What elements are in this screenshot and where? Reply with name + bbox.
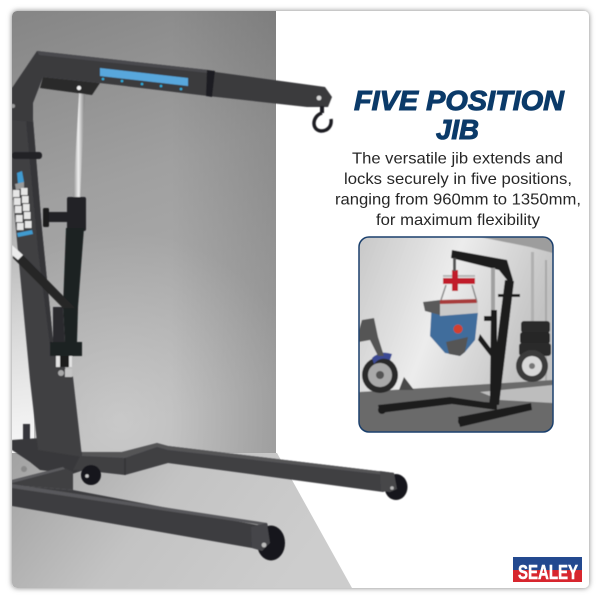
SEALEY logo: SEALEY	[518, 562, 578, 584]
lifting chains	[441, 285, 477, 302]
small caster wheel	[81, 465, 101, 485]
lower cylinder block	[50, 342, 82, 377]
mini crane	[378, 250, 532, 427]
jib inner extension	[208, 71, 332, 107]
hydraulic ram rod	[73, 93, 85, 200]
pivot pins	[77, 86, 81, 90]
jib arm	[11, 51, 332, 122]
lifting hook	[314, 106, 331, 131]
front wheel	[251, 523, 285, 560]
base rear frame	[12, 424, 84, 474]
garage floor	[359, 380, 553, 432]
heading	[354, 85, 565, 145]
heading: JIB	[436, 114, 479, 145]
capacity sticker	[13, 171, 33, 237]
body text	[335, 150, 581, 229]
stacked tyres	[516, 321, 551, 382]
body text: The versatile jib extends and	[352, 150, 563, 168]
grey studio backdrop	[12, 11, 352, 588]
base front leg	[12, 467, 270, 548]
base back wheel	[384, 474, 408, 500]
body text: locks securely in five positions,	[344, 171, 572, 188]
inset photo border	[359, 237, 553, 432]
engine block	[423, 299, 478, 356]
base back leg	[73, 443, 397, 492]
diagonal support brace	[12, 256, 74, 308]
spreader bar	[443, 258, 475, 291]
inset photo: engine on crane in garage	[359, 237, 553, 432]
garage wall	[359, 237, 553, 392]
body text: for maximum flexibility	[376, 212, 540, 229]
jib position scale label	[100, 68, 188, 90]
crane ram rod	[491, 268, 495, 310]
axle stands	[399, 377, 414, 390]
heading: FIVE POSITION	[354, 85, 565, 116]
motorcycle	[359, 318, 398, 393]
body text: ranging from 960mm to 1350mm,	[335, 192, 581, 208]
crane product photo	[11, 51, 408, 560]
hydraulic cylinder	[43, 197, 86, 342]
upright column	[12, 120, 82, 457]
side handle	[12, 152, 42, 159]
garage ceiling pipe	[480, 237, 553, 253]
SEALEY logo	[513, 557, 582, 584]
